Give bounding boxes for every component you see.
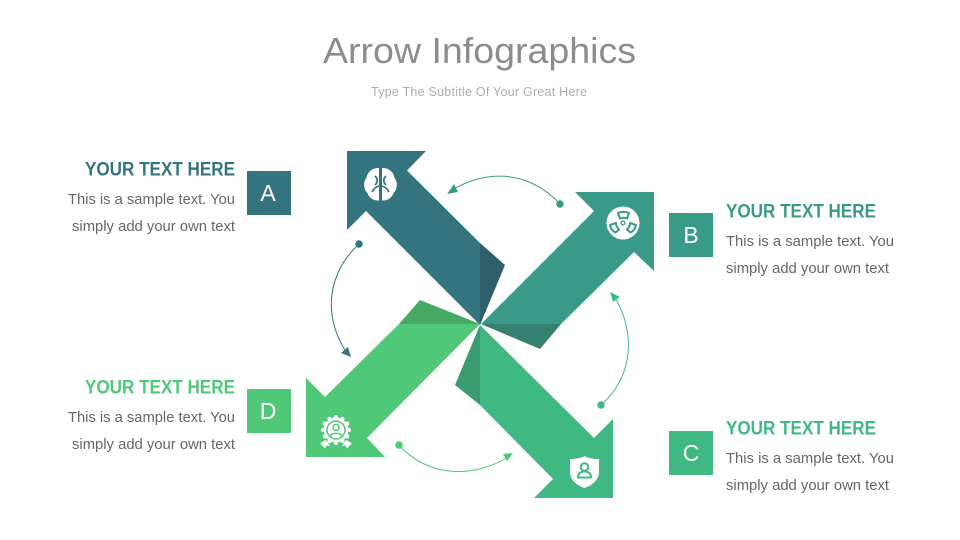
text block D (68, 378, 235, 453)
arrow B (481, 192, 654, 349)
label box D: D (260, 398, 276, 424)
curved arrow: B to A (447, 176, 564, 208)
curved arrow: A to D (331, 240, 363, 357)
label box A (247, 171, 291, 215)
arrow A (347, 151, 505, 325)
curved arrow: C to B (597, 292, 628, 409)
label box B (669, 213, 713, 257)
text block B: This is a sample text. You (726, 234, 894, 250)
label box B: B (683, 222, 699, 248)
text block D: YOUR TEXT HERE (85, 378, 235, 398)
icon: brain (364, 168, 397, 201)
label box C (669, 431, 713, 475)
text block B: simply add your own text (726, 261, 889, 277)
text block C: YOUR TEXT HERE (726, 418, 876, 440)
text block D: This is a sample text. You (68, 410, 235, 426)
text block C: simply add your own text (726, 478, 889, 494)
label box A: A (260, 180, 276, 206)
label box D (247, 389, 291, 433)
curved arrow: D to C (395, 441, 513, 472)
text block C (726, 418, 894, 494)
text block C: This is a sample text. You (726, 451, 894, 467)
text block B: YOUR TEXT HERE (726, 202, 876, 222)
icon: radiation (606, 206, 640, 240)
text block A: simply add your own text (72, 219, 235, 235)
text block D: simply add your own text (72, 437, 235, 453)
arrow D (306, 300, 480, 457)
text block A: YOUR TEXT HERE (85, 160, 235, 180)
arrow C (455, 325, 613, 498)
subtitle: Type The Subtitle Of Your Great Here (371, 85, 587, 99)
text block B (726, 202, 894, 277)
text block A (68, 160, 235, 235)
text block A: This is a sample text. You (68, 192, 235, 208)
title: Arrow Infographics (323, 30, 636, 71)
icon: shield (570, 456, 599, 488)
label box C: C (683, 440, 699, 466)
icon: award badge (320, 415, 352, 448)
